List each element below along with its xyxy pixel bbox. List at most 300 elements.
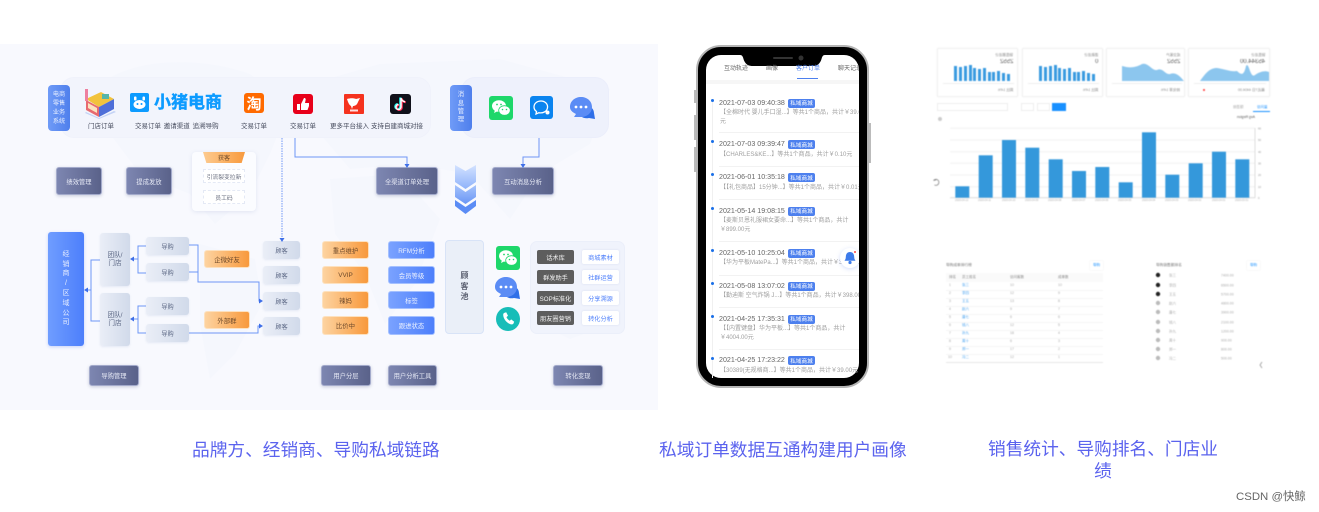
ranking rows: 冯二 xyxy=(1169,355,1176,360)
export button xyxy=(1247,261,1260,270)
order 2 description: 【CHARLES&KE...】等共1个商品，共计￥0.10元 xyxy=(720,152,852,158)
box: dealer or regional company: 公 xyxy=(62,310,70,317)
caption: brand dealer guide chain: 品牌方、经销商、导购私域链路 xyxy=(192,440,440,460)
phone body xyxy=(696,45,869,388)
order 1 chip: 私域商城 xyxy=(790,101,813,107)
box: interaction message analysis: 互动消息分析 xyxy=(504,178,542,186)
box: customer pool: 客 xyxy=(460,282,468,291)
card title: 成交客户 xyxy=(1166,53,1180,57)
active tab: 访问量 xyxy=(1257,105,1268,109)
box: key maintenance xyxy=(322,241,369,259)
order 3 chip xyxy=(788,173,815,182)
main bar chart: Avg Region xyxy=(1237,115,1255,119)
phone mockup xyxy=(694,45,871,388)
box: tags xyxy=(388,291,435,309)
box: team or store one: 团队/ xyxy=(107,252,123,258)
table rows: 9 xyxy=(1058,291,1060,295)
table rows: 7 xyxy=(1058,307,1060,311)
community operations: 社群运营 xyxy=(588,274,613,282)
table rows: 李四 xyxy=(962,291,969,295)
order 4 description end: ￥899.00元 xyxy=(720,227,750,233)
box: customer two: 顾客 xyxy=(275,272,288,280)
caption: private order data user portrait: 私域订单数据互通构建用户画像 xyxy=(659,440,907,460)
box: VVIP: VVIP xyxy=(338,272,353,278)
dashboard filter row xyxy=(937,102,1271,113)
table rows: 10 xyxy=(948,355,952,359)
panel: message channel strip xyxy=(461,77,609,138)
order 8 time: 2021-04-25 17:23:22 xyxy=(719,356,785,364)
order 4 chip xyxy=(788,206,815,216)
order 2 chip xyxy=(788,140,815,149)
box: interaction message analysis xyxy=(492,167,554,195)
box: dealer or regional company: 销 xyxy=(62,261,70,268)
ranking rows: 5700.00 xyxy=(1221,292,1234,296)
table rows: 钱八 xyxy=(962,323,969,327)
main bar chart: 2020-04-08 xyxy=(1048,198,1062,202)
mall assets: 商城素材 xyxy=(588,254,613,262)
label: 交易订单 xyxy=(241,123,267,130)
label: 支持自建商城对接 xyxy=(371,123,423,130)
box: follow-up status: 跟进状态 xyxy=(399,323,424,330)
tab: 销售额 xyxy=(1233,105,1244,109)
stat card two xyxy=(1022,48,1103,97)
script library xyxy=(537,250,574,264)
order 4 time: 2021-05-14 19:08:15 xyxy=(719,206,785,214)
box: dealer or regional company: / xyxy=(65,280,67,287)
active button xyxy=(1052,103,1066,111)
stat card four xyxy=(1188,48,1270,97)
moments marketing xyxy=(537,311,574,325)
card title: 销售总计 xyxy=(1251,53,1265,57)
box: performance management xyxy=(56,167,102,195)
label: 门店订单 xyxy=(88,123,114,130)
order 2 chip: 私域商城 xyxy=(790,142,813,148)
box: guide three xyxy=(146,297,189,315)
main bar chart: 50 xyxy=(1258,138,1262,142)
table rows: 13 xyxy=(1010,299,1014,303)
referral fission: 引流裂变拉新 xyxy=(207,174,241,180)
table rows: 10 xyxy=(1010,283,1014,287)
table rows: 5 xyxy=(1058,323,1060,327)
badge: ecommerce retail business system: 电商 xyxy=(53,91,65,98)
card footer: 转化率 14% xyxy=(1161,88,1180,92)
mini bars xyxy=(944,64,1014,84)
box: all-channel order processing xyxy=(376,167,438,195)
badge: ecommerce retail business system: 系统 xyxy=(53,118,65,125)
ranking rows: 孙九 xyxy=(1169,328,1176,333)
box: guide two xyxy=(146,263,189,281)
table rows: 9 xyxy=(949,347,951,351)
icon: work wechat xyxy=(530,96,553,119)
phone screen content xyxy=(706,64,859,378)
order 2 time: 2021-07-03 09:39:47 xyxy=(719,140,785,148)
table rows: 4 xyxy=(949,307,951,311)
box: work wechat friends: 企微好友 xyxy=(214,256,240,264)
table rows: 10 xyxy=(1058,283,1062,287)
order 7 chip: 私域商城 xyxy=(790,317,813,323)
box: guide four xyxy=(146,324,189,342)
ranking rows: 2100.00 xyxy=(1221,320,1234,324)
area chart xyxy=(1112,63,1184,84)
badge: message management xyxy=(450,85,472,131)
icon: thumbs up app xyxy=(293,94,313,114)
table rows: 3 xyxy=(1058,339,1060,343)
box: guide four: 导购 xyxy=(161,330,174,338)
icon: wechat small xyxy=(496,246,520,270)
badge: ecommerce retail business system xyxy=(48,85,70,131)
export button: 导购 xyxy=(1250,263,1257,267)
box: member level: 会员等级 xyxy=(399,272,424,280)
order 3 chip: 私域商城 xyxy=(790,176,813,182)
main bar chart: 30 xyxy=(1258,162,1262,166)
box: team or store two xyxy=(100,293,130,346)
order 3 description: 【【礼包商品】15分钟...】等共1个商品，共计￥0.01元 xyxy=(720,185,864,191)
box: customer three: 顾客 xyxy=(275,298,288,306)
table rows: 3 xyxy=(949,299,951,303)
world map backdrop xyxy=(0,44,658,410)
order 5 chip xyxy=(788,248,815,258)
tab: 画像 xyxy=(766,66,778,72)
box: VVIP xyxy=(322,266,369,284)
icon: taobao xyxy=(244,93,264,113)
main bar chart: 2020-04-09 xyxy=(1025,198,1039,202)
table rows: 18 xyxy=(1010,331,1014,335)
conversion analysis xyxy=(582,311,619,325)
table rows: 17 xyxy=(1010,347,1014,351)
main bar chart: 10 xyxy=(1258,185,1262,189)
main bar chart: 2020-04-07 xyxy=(1072,198,1086,202)
card footer: 周比 14% xyxy=(998,88,1013,92)
table rows: 8 xyxy=(1058,299,1060,303)
ranking rows: 赵六 xyxy=(1169,300,1176,305)
icon: chat small xyxy=(495,277,520,299)
panel: ecommerce systems strip xyxy=(60,77,431,138)
box: customer three xyxy=(263,292,300,310)
referral fission xyxy=(203,169,245,183)
order 6 time: 2021-05-08 13:07:02 xyxy=(719,282,785,290)
order 1 chip xyxy=(788,98,815,108)
logo wordmark: 小猪电商 xyxy=(154,93,222,112)
box: all-channel order processing: 全渠道订单处理 xyxy=(385,178,429,186)
date picker xyxy=(937,103,1008,111)
acquisition tab xyxy=(203,152,245,163)
icon: phone call xyxy=(496,307,520,331)
box: customer two xyxy=(263,266,300,284)
box: user tiering: 用户分层 xyxy=(333,373,359,380)
box: user analysis tools: 用户分析工具 xyxy=(394,373,431,380)
box: customer four: 顾客 xyxy=(275,324,288,330)
order 4 xyxy=(711,207,714,210)
order 7 xyxy=(711,315,714,318)
mall assets xyxy=(582,250,619,264)
order 5 time: 2021-05-10 10:25:04 xyxy=(719,248,785,256)
order 7 description: 【【内置键盘】华为平板...】等共1个商品，共计 xyxy=(720,326,845,332)
order 6 description: 【勤迪斯 空气炸锅 J...】等共1个商品，共计￥398.00元 xyxy=(720,293,867,299)
order 8 description: 【30389(无规格商...】等共1个商品，共计￥39.00元 xyxy=(720,368,858,374)
mini bars xyxy=(1028,64,1098,84)
SOP standardization xyxy=(537,291,574,305)
panel: sales dashboard top stat cards xyxy=(937,48,1270,97)
main bar chart: 2020-04-05 xyxy=(1118,198,1132,202)
box: key maintenance: 重点维护 xyxy=(333,248,358,254)
table rows: 6 xyxy=(949,323,951,327)
stat card one xyxy=(937,48,1018,97)
ranking rows: 3900.00 xyxy=(1221,310,1234,314)
active tab underline xyxy=(1253,111,1270,112)
box: commission payout: 提成发放 xyxy=(136,178,162,186)
order 1 description: 【全棉时代 婴儿手口湿...】等共1个商品，共计￥39.00 xyxy=(720,110,865,116)
order 5 description: 【华为平板MatePa...】等共1个商品，共计￥3999.00 xyxy=(720,260,861,266)
box: external group xyxy=(204,311,250,329)
panel: conversion tools xyxy=(530,241,625,334)
card title: 退款总计 xyxy=(1084,53,1098,57)
icon: chevrons down xyxy=(455,165,476,214)
box: price comparing xyxy=(322,316,369,335)
SOP standardization: SOP标准化 xyxy=(540,296,571,302)
ranking: guide sales xyxy=(1155,262,1263,368)
table rows: 2 xyxy=(949,291,951,295)
moments marketing: 朋友圈营销 xyxy=(540,316,571,322)
main bar chart: 2020-03-31 xyxy=(1235,198,1249,202)
ranking rows: 800.00 xyxy=(1221,347,1232,351)
box: member level xyxy=(388,266,435,284)
area chart xyxy=(1194,64,1270,92)
ranking rows xyxy=(1155,272,1263,368)
table rows: 王五 xyxy=(962,299,969,303)
ranking title: 导购销售额排名 xyxy=(1156,263,1182,267)
table: guide order ranking xyxy=(946,262,1103,363)
card value: 0 xyxy=(1095,59,1098,65)
box: user tiering xyxy=(321,365,371,386)
table title: 导购成单排行榜 xyxy=(946,263,972,267)
box: conversion monetization xyxy=(553,365,603,386)
ranking rows: 王五 xyxy=(1169,292,1176,296)
ranking rows: 900.00 xyxy=(1221,338,1232,342)
table rows: 郑一 xyxy=(962,347,969,351)
order 7 chip xyxy=(788,314,815,324)
label: 交易订单 xyxy=(290,123,316,130)
order 5 xyxy=(711,249,714,252)
ranking rows: 4800.00 xyxy=(1221,301,1234,305)
table rows: 6 xyxy=(1010,339,1012,343)
logo mark xyxy=(130,93,149,112)
card: customer acquisition xyxy=(192,152,256,211)
icon: storefront xyxy=(85,89,116,119)
table rows: 赵六 xyxy=(962,307,969,311)
main bar chart: 2020-04-06 xyxy=(1095,198,1109,202)
table rows: 12 xyxy=(1010,323,1014,327)
table rows xyxy=(946,282,1103,363)
icon: tiktok xyxy=(390,94,411,114)
export button: 导购 xyxy=(1093,263,1100,267)
badge: message management: 管 xyxy=(458,108,464,115)
active tab: 客户订单 xyxy=(796,66,820,72)
card title: 销售额总计 xyxy=(995,53,1013,57)
group sending helper: 群发助手 xyxy=(543,274,568,282)
script library: 话术库 xyxy=(546,254,565,262)
box: customer four xyxy=(263,317,300,335)
table rows: 4 xyxy=(1058,331,1060,335)
column head: 员工姓名 xyxy=(962,275,976,279)
main bar chart: 2020-04-11 xyxy=(978,198,992,202)
box: dealer or regional company: 司 xyxy=(62,319,70,326)
main bar chart: 60 xyxy=(1258,126,1262,130)
ranking rows: 张三 xyxy=(1169,272,1176,277)
order 2 xyxy=(711,140,714,143)
table rows: 5 xyxy=(949,315,951,319)
main bar chart: 2020-04-03 xyxy=(1165,198,1179,202)
main bar chart: 2020-04-12 xyxy=(955,198,969,202)
ranking rows: 周十 xyxy=(1169,337,1176,342)
tab: 互动轨迹 xyxy=(724,66,748,72)
table rows: 1 xyxy=(949,283,951,287)
column head: 排名 xyxy=(949,275,956,279)
button xyxy=(1037,103,1050,111)
box: customer one xyxy=(263,241,300,259)
order 3 time: 2021-06-01 10:35:18 xyxy=(719,172,785,180)
main bar chart: 20 xyxy=(1258,173,1262,177)
icon: more platforms xyxy=(344,94,364,114)
box: dealer or regional company: 域 xyxy=(62,300,70,307)
staff code xyxy=(203,190,245,204)
order 7 time: 2021-04-25 17:35:31 xyxy=(719,314,785,322)
badge: ecommerce retail business system: 业务 xyxy=(53,109,65,116)
main bar chart: 40 xyxy=(1258,150,1262,154)
header band xyxy=(946,273,1103,282)
side buttons xyxy=(694,90,871,172)
table rows: 9 xyxy=(1010,307,1012,311)
order 4 description: 【麦斯贝恩礼服裙女要命...】等共1个商品，共计 xyxy=(720,218,848,224)
order 4 chip: 私域商城 xyxy=(790,209,813,215)
main bar chart xyxy=(932,115,1262,202)
export button xyxy=(1090,261,1103,270)
box: team or store one: 门店 xyxy=(108,260,122,266)
button xyxy=(1021,103,1034,111)
box: guide one xyxy=(146,237,189,255)
card value: 2552 xyxy=(1167,59,1180,65)
box: guide management: 导购管理 xyxy=(101,373,127,380)
ranking rows: 7400.00 xyxy=(1221,273,1234,277)
share tracing xyxy=(582,291,619,305)
order 5 chip: 私域商城 xyxy=(790,251,813,257)
panel: brand dealer guide private-domain flow xyxy=(0,44,658,410)
table rows: 2 xyxy=(1058,347,1060,351)
icon: wechat xyxy=(489,96,513,120)
box: customer pool: 池 xyxy=(460,292,468,301)
ranking rows: 500.00 xyxy=(1221,356,1232,360)
column head: 访问客数 xyxy=(1010,275,1024,279)
box: guide one: 导购 xyxy=(161,244,174,250)
icon: notification bell xyxy=(840,248,860,268)
box: guide management xyxy=(89,365,139,386)
box: hot moms: 辣妈 xyxy=(339,298,352,304)
box: performance management: 绩效管理 xyxy=(66,178,92,186)
table rows: 周十 xyxy=(962,339,969,343)
box: customer one: 顾客 xyxy=(275,248,288,254)
conversion analysis: 转化分析 xyxy=(588,316,613,322)
order 8 xyxy=(711,357,714,360)
main bar chart: 2020-04-10 xyxy=(1002,198,1016,202)
box: customer pool xyxy=(445,240,484,334)
tab: 聊天记录 xyxy=(838,66,862,72)
column head: 成单数 xyxy=(1058,275,1068,279)
active underline xyxy=(797,78,818,79)
order 6 xyxy=(711,282,714,285)
ranking rows: 1200.00 xyxy=(1221,329,1234,333)
table rows: 冯二 xyxy=(962,355,969,359)
table rows: 7 xyxy=(949,331,951,335)
table rows: 6 xyxy=(1058,315,1060,319)
card footer: 最近7日 4404.00 xyxy=(1238,88,1265,92)
label: 交易订单 邀请渠道 追溯导购 xyxy=(135,123,219,130)
table rows: 张三 xyxy=(962,283,969,287)
table rows: 唐七 xyxy=(962,315,969,319)
watermark: CSDN @快鲸 xyxy=(1236,491,1306,503)
order 6 chip: 私域商城 xyxy=(790,284,813,290)
table rows: 12 xyxy=(1010,355,1014,359)
box: user analysis tools xyxy=(388,365,437,386)
box: dealer or regional company: 商 xyxy=(62,270,70,277)
table rows: 12 xyxy=(1010,291,1014,295)
label: 更多平台接入 xyxy=(330,123,369,130)
box: commission payout xyxy=(126,167,172,195)
box: guide three: 导购 xyxy=(161,304,174,310)
icon: chat bubbles xyxy=(570,97,595,119)
badge: message management: 息 xyxy=(458,100,464,107)
notch xyxy=(740,55,825,66)
ranking rows: 6500.00 xyxy=(1221,283,1234,287)
ranking rows: 钱八 xyxy=(1169,319,1176,324)
main bar chart: 2020-04-02 xyxy=(1188,198,1202,202)
box: customer pool: 顾 xyxy=(460,271,468,280)
ranking rows: 李四 xyxy=(1169,282,1176,287)
badge: message management: 消 xyxy=(458,91,464,98)
caption: sales stats guide ranking store performance: 销售统计、导购排名、门店业绩 xyxy=(988,439,1218,480)
staff code: 员工码 xyxy=(215,196,233,202)
order 1 time: 2021-07-03 09:40:38 xyxy=(719,98,785,106)
box: follow-up status xyxy=(388,316,435,335)
card footer: 周比 14% xyxy=(1083,88,1098,92)
icon: taobao: 淘 xyxy=(246,96,262,112)
card value: 2552 xyxy=(1000,59,1013,65)
tab band xyxy=(706,80,859,84)
acquisition tab: 获客 xyxy=(218,156,230,162)
box: RFM analysis: RFM分析 xyxy=(398,248,425,254)
table rows: 8 xyxy=(949,339,951,343)
main bar chart: 2020-04-04 xyxy=(1142,198,1156,202)
box: RFM analysis xyxy=(388,241,435,259)
box: tags: 标签 xyxy=(405,298,418,304)
share tracing: 分享溯源 xyxy=(588,296,613,302)
box: work wechat friends xyxy=(204,250,250,268)
box: hot moms xyxy=(322,291,369,309)
order 7 description end: ￥4004.00元 xyxy=(720,335,754,341)
ranking rows: 郑一 xyxy=(1169,346,1176,351)
screen xyxy=(706,55,859,378)
order 1 xyxy=(711,99,714,102)
box: external group: 外部群 xyxy=(217,318,237,324)
stat card three xyxy=(1106,48,1185,97)
platform labels xyxy=(88,122,423,130)
table rows: 孙九 xyxy=(962,331,969,335)
ranking rows: 唐七 xyxy=(1169,309,1176,314)
card value: 45344.00 xyxy=(1240,59,1265,65)
timeline xyxy=(712,100,713,378)
arrows: flow connectors xyxy=(84,138,540,334)
box: guide two: 导购 xyxy=(161,270,174,276)
box: price comparing: 比价中 xyxy=(336,323,355,330)
box: team or store two: 门店 xyxy=(108,320,122,326)
